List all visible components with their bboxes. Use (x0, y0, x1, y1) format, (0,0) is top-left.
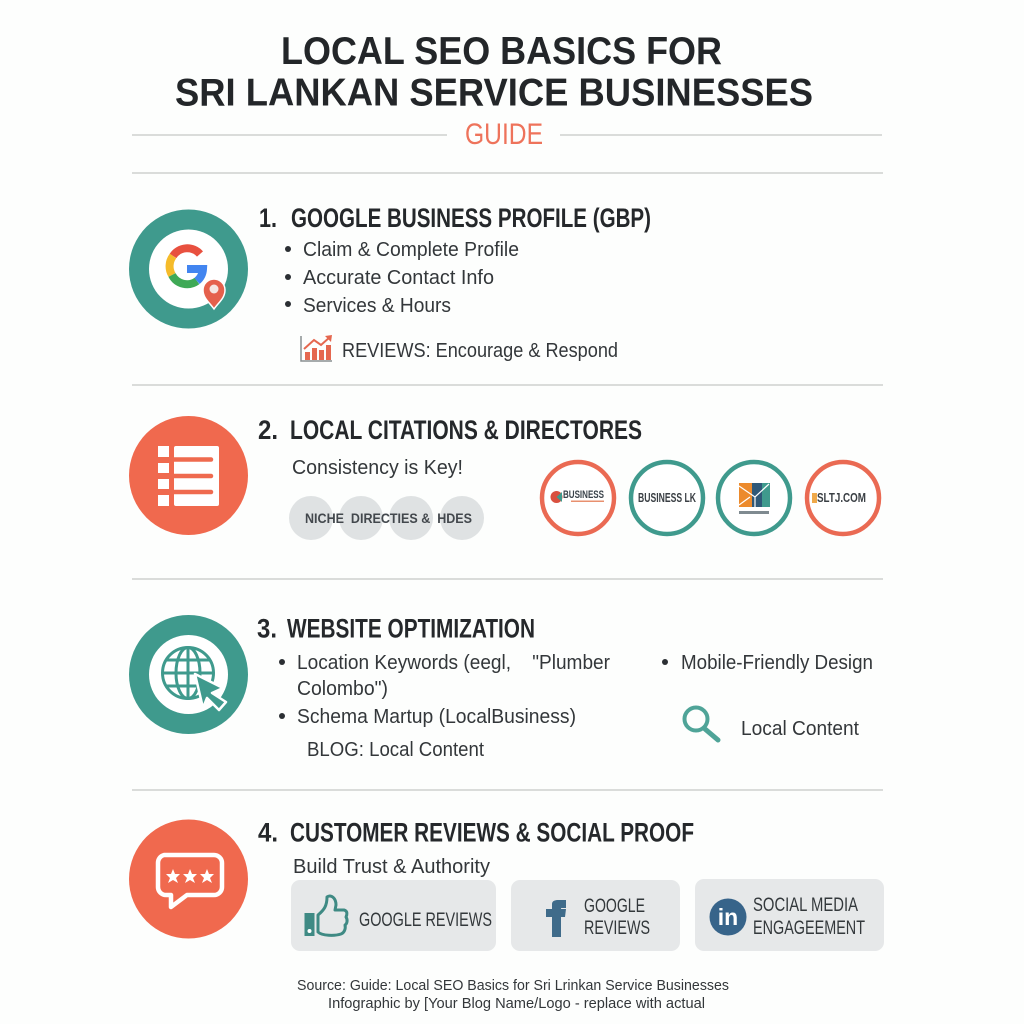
icon: thumbs up (304, 896, 347, 936)
panel: local citations (129, 415, 879, 540)
label (584, 895, 650, 939)
bullet list 3 left: Schema Martup (LocalBusiness) (297, 706, 576, 728)
label: ENGAGEEMENT (753, 917, 865, 939)
niche directory chips (289, 496, 484, 540)
niche directory chips: NICHE DIRECTIES & HDES (305, 511, 472, 526)
title: LOCAL SEO BASICS FOR (281, 30, 722, 73)
icon: directory list (129, 416, 248, 535)
icon: linkedin: in (718, 904, 738, 930)
bullet list 1: Claim & Complete Profile (303, 239, 519, 261)
logo badge: sltj.com: SLTJ.COM (817, 491, 866, 505)
heading 4: 4. (258, 818, 278, 848)
footer source: Source: Guide: Local SEO Basics for Sri Lrinkan Service Businesses (297, 978, 729, 994)
label (753, 894, 865, 939)
icon: rating speech bubble (129, 820, 248, 938)
card: google reviews: GOOGLE REVIEWS (359, 909, 492, 931)
bullet list 1: Accurate Contact Info (303, 267, 494, 289)
icon: facebook f (546, 900, 566, 937)
panel: website optimization (129, 614, 873, 761)
bullet list 3 left: BLOG: Local Content (307, 739, 484, 761)
bullet: mobile-friendly: Mobile-Friendly Design (681, 652, 873, 674)
title (175, 30, 813, 114)
bullet list 1 (285, 239, 519, 317)
bullet list 3 left (279, 652, 610, 761)
card: google reviews (291, 880, 496, 951)
tagline: Consistency is Key! (292, 457, 463, 479)
icon: growth chart (301, 335, 332, 361)
logo badge: business.lk: BUSINESS LK (638, 491, 696, 505)
local content label: Local Content (741, 718, 859, 740)
subtitle: guide: GUIDE (465, 118, 543, 151)
logo badge: business: BUSINESS (563, 489, 604, 501)
footer source: Infographic by [Your Blog Name/Logo - replace with actual (328, 996, 705, 1012)
icon: google G with map pin (129, 210, 248, 328)
label: SOCIAL MEDIA (753, 894, 858, 916)
panel: customer reviews (129, 818, 884, 951)
logo badge: business.lk (631, 462, 703, 534)
heading 1: GOOGLE BUSINESS PROFILE (GBP) (291, 203, 651, 233)
label: GOOGLE (584, 895, 645, 917)
icon: magnifier (684, 708, 718, 740)
card: facebook (511, 880, 680, 951)
reviews note: REVIEWS: Encourage & Respond (342, 340, 618, 362)
bullet list 1: Services & Hours (303, 295, 451, 317)
logo badge: geometric mark (718, 462, 790, 534)
title: SRI LANKAN SERVICE BUSINESSES (175, 72, 813, 114)
bullet list 3 left: Colombo") (297, 678, 388, 700)
icon: linkedin (710, 898, 746, 936)
icon: globe with cursor (129, 615, 248, 734)
logo badge: sltj.com (807, 462, 879, 534)
logo badge: business (542, 462, 614, 534)
tagline: Build Trust & Authority (293, 856, 490, 878)
heading 2: LOCAL CITATIONS & DIRECTORES (290, 415, 642, 445)
heading 4: CUSTOMER REVIEWS & SOCIAL PROOF (290, 818, 694, 848)
heading 2: 2. (258, 415, 278, 445)
card: social media (695, 879, 884, 951)
heading 1: 1. (259, 203, 277, 233)
panel: google business profile (129, 203, 651, 362)
bullet list 3 left: Location Keywords (eegl, "Plumber (297, 652, 610, 674)
heading 3: WEBSITE OPTIMIZATION (287, 614, 535, 644)
footer source (297, 978, 729, 1012)
heading 3: 3. (257, 614, 277, 644)
label: REVIEWS (584, 917, 650, 939)
